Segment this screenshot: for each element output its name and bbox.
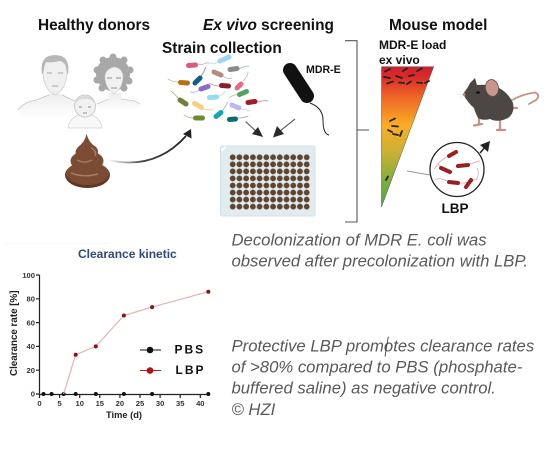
- arrow: LBP to mouse: [480, 141, 490, 153]
- text block: decolonization: Decolonization of MDR E. coli was: [232, 231, 487, 250]
- heading: Healthy donors: Healthy donors: [38, 17, 150, 34]
- series: LBP: [64, 290, 210, 394]
- y tick labels: 40: [27, 342, 35, 351]
- x tick labels: 35: [176, 399, 185, 408]
- x tick labels: 20: [116, 399, 124, 408]
- y tick labels: 100: [22, 271, 35, 280]
- arrow: MDR-E to plate: [273, 119, 295, 138]
- y tick labels: 20: [27, 366, 35, 375]
- decorative faint line: [5, 242, 110, 244]
- y axis label: Clearance rate [%]: [9, 290, 20, 376]
- text cursor mark: [385, 336, 388, 356]
- x tick labels: 0: [37, 399, 42, 408]
- legend: [140, 342, 206, 377]
- text block: protective LBP: of >80% compared to PBS (phosphate-: [232, 358, 523, 377]
- legs: [474, 108, 517, 130]
- series: PBS: [42, 392, 210, 396]
- x axis label: Time (d): [106, 410, 142, 420]
- y tick labels: 80: [27, 294, 35, 304]
- connector: wedge to LBP: [407, 171, 430, 175]
- y tick labels: 60: [27, 318, 35, 327]
- tail: [512, 92, 538, 104]
- label: MDR-E load ex vivo: ex vivo: [379, 53, 420, 67]
- body: [463, 78, 513, 121]
- arrow: strain to plate: [246, 122, 263, 137]
- label: MDR-E: MDR-E: [306, 64, 341, 76]
- text block: protective LBP: © HZI: [232, 400, 276, 419]
- text block: protective LBP: buffered saline) as negative control.: [232, 379, 496, 398]
- heading: Ex vivo screening: Ex vivo screening: [203, 17, 334, 34]
- arrow: stool to strain collection: [108, 129, 192, 163]
- label: MDR-E load ex vivo: MDR-E load: [379, 38, 446, 52]
- ear: [484, 79, 500, 97]
- x tick labels: 40: [196, 399, 205, 408]
- heading: Mouse model: Mouse model: [389, 17, 487, 34]
- icon: 96-well plate: [220, 146, 315, 216]
- heading: Strain collection: Strain collection: [162, 40, 282, 57]
- axes: [36, 275, 209, 398]
- icon: LBP magnified circle: [430, 142, 484, 196]
- icon: human donors: [18, 54, 140, 128]
- chart: clearance kinetic: [9, 247, 210, 420]
- x tick labels: 5: [57, 399, 62, 408]
- x tick labels: 25: [136, 399, 145, 408]
- x tick labels: 15: [96, 399, 105, 408]
- baby: [68, 95, 102, 128]
- icon: mouse: [458, 78, 538, 130]
- icon: stool sample: [65, 134, 110, 188]
- icon: strain collection bacteria: [168, 57, 268, 120]
- x tick labels: 30: [156, 399, 164, 408]
- chart title: Clearance kinetic: [78, 247, 177, 261]
- text block: protective LBP: Protective LBP promotes clearance rates: [232, 337, 534, 356]
- legend: LBP: [176, 363, 206, 377]
- man: [18, 55, 76, 118]
- bracket: [345, 41, 369, 222]
- x tick labels: 10: [75, 399, 84, 408]
- icon: MDR-E bacterium: [290, 70, 329, 135]
- legend: PBS: [174, 342, 205, 356]
- woman: [94, 54, 140, 112]
- chart: MDR-E load gradient wedge: [382, 67, 434, 207]
- y tick labels: 0: [31, 390, 35, 398]
- text block: decolonization: observed after precolonization with LBP.: [232, 252, 528, 271]
- label: LBP: LBP: [442, 201, 468, 216]
